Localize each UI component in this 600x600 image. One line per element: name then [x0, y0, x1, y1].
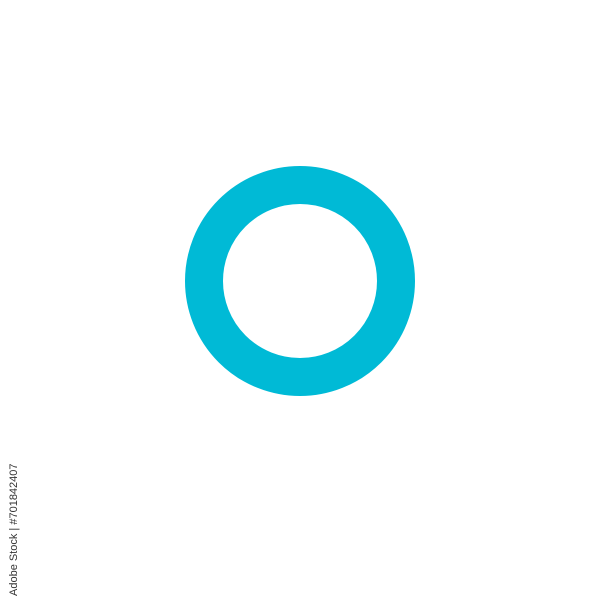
stock id text: Adobe Stock | #701842407: [8, 463, 20, 596]
